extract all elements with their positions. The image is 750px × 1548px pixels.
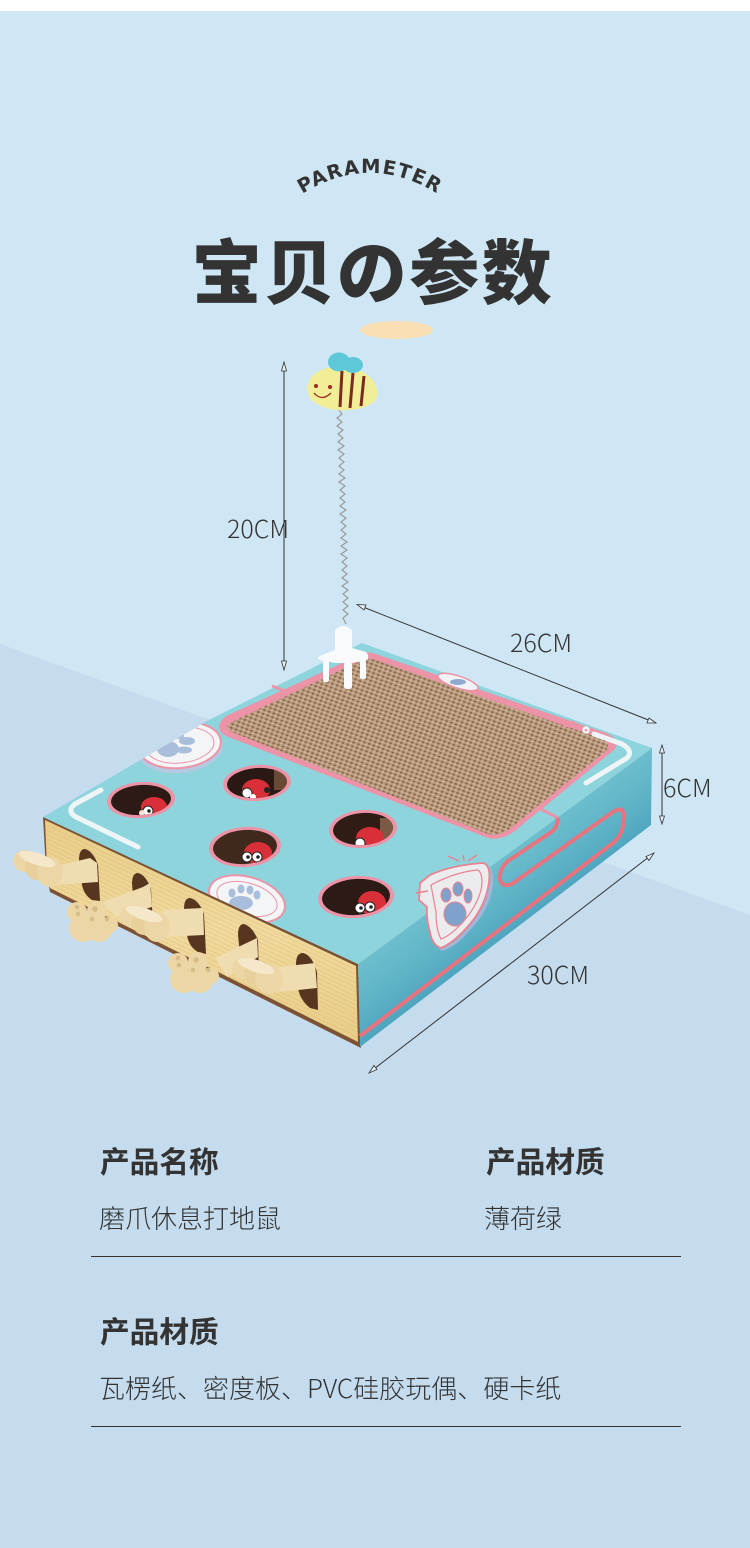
- label 26CM: 26CM: [510, 624, 572, 660]
- paw badge: back-left: [140, 723, 223, 774]
- paw handle 3: [120, 902, 170, 942]
- title: 宝贝の参数: [192, 218, 554, 319]
- spec: materials: 瓦楞纸、密度板、PVC硅胶玩偶、硬卡纸: [99, 1369, 561, 1406]
- hole 1 with mole: [107, 782, 175, 818]
- hole 2 with mole: [223, 764, 291, 802]
- dimension arrow: height 20CM: [282, 362, 286, 670]
- dimension arrow: width 26CM: [357, 604, 656, 723]
- label 20CM: 20CM: [227, 510, 289, 546]
- spec: colour: 产品材质: [486, 1146, 605, 1180]
- spec: product name: [99, 1146, 281, 1236]
- spec: colour: 薄荷绿: [484, 1199, 562, 1236]
- pink frame and corrugated scratch pad: [219, 652, 617, 839]
- spec: materials: 产品材质: [100, 1316, 219, 1350]
- spec: colour: [484, 1146, 605, 1236]
- paw handle 1: [13, 847, 63, 887]
- divider 2: [91, 1426, 681, 1427]
- paw handle 4: [168, 952, 219, 993]
- white corner marks: [71, 729, 630, 847]
- spec: product name: 磨爪休息打地鼠: [99, 1199, 281, 1236]
- spec: product name: 产品名称: [100, 1146, 219, 1180]
- handle arms: [56, 858, 317, 992]
- box left wood face: [43, 817, 361, 1048]
- dimension arrow: height 6CM: [660, 745, 664, 824]
- paw badge: front: [208, 874, 286, 922]
- dimension arrow: length 30CM: [369, 853, 654, 1073]
- pink S-shaped line on side: [360, 809, 624, 1036]
- white fork holder: [318, 626, 368, 689]
- hole 5 with mole: [318, 876, 394, 918]
- label 30CM: 30CM: [527, 956, 589, 992]
- box right side face: [358, 748, 652, 1047]
- spec: materials: [99, 1316, 561, 1406]
- paw handle 2: [67, 901, 118, 942]
- product: whack-a-mole cat scratcher box: [13, 352, 652, 1048]
- slots in wood face: [79, 849, 318, 1010]
- divider 1: [91, 1256, 681, 1257]
- paw handle 5: [232, 954, 283, 994]
- spring: [337, 410, 348, 624]
- hole 3 with mole: [209, 826, 281, 868]
- peach oval accent: [360, 321, 433, 339]
- label 6CM: 6CM: [663, 769, 712, 805]
- box top face: [43, 643, 652, 964]
- plush bee: [307, 352, 378, 410]
- paw badge: back-right small: [436, 670, 480, 694]
- paw shield on side: [416, 855, 493, 951]
- subtitle: PARAMETER: PARAMETER: [296, 158, 440, 193]
- hole 4 with mole: [329, 810, 397, 848]
